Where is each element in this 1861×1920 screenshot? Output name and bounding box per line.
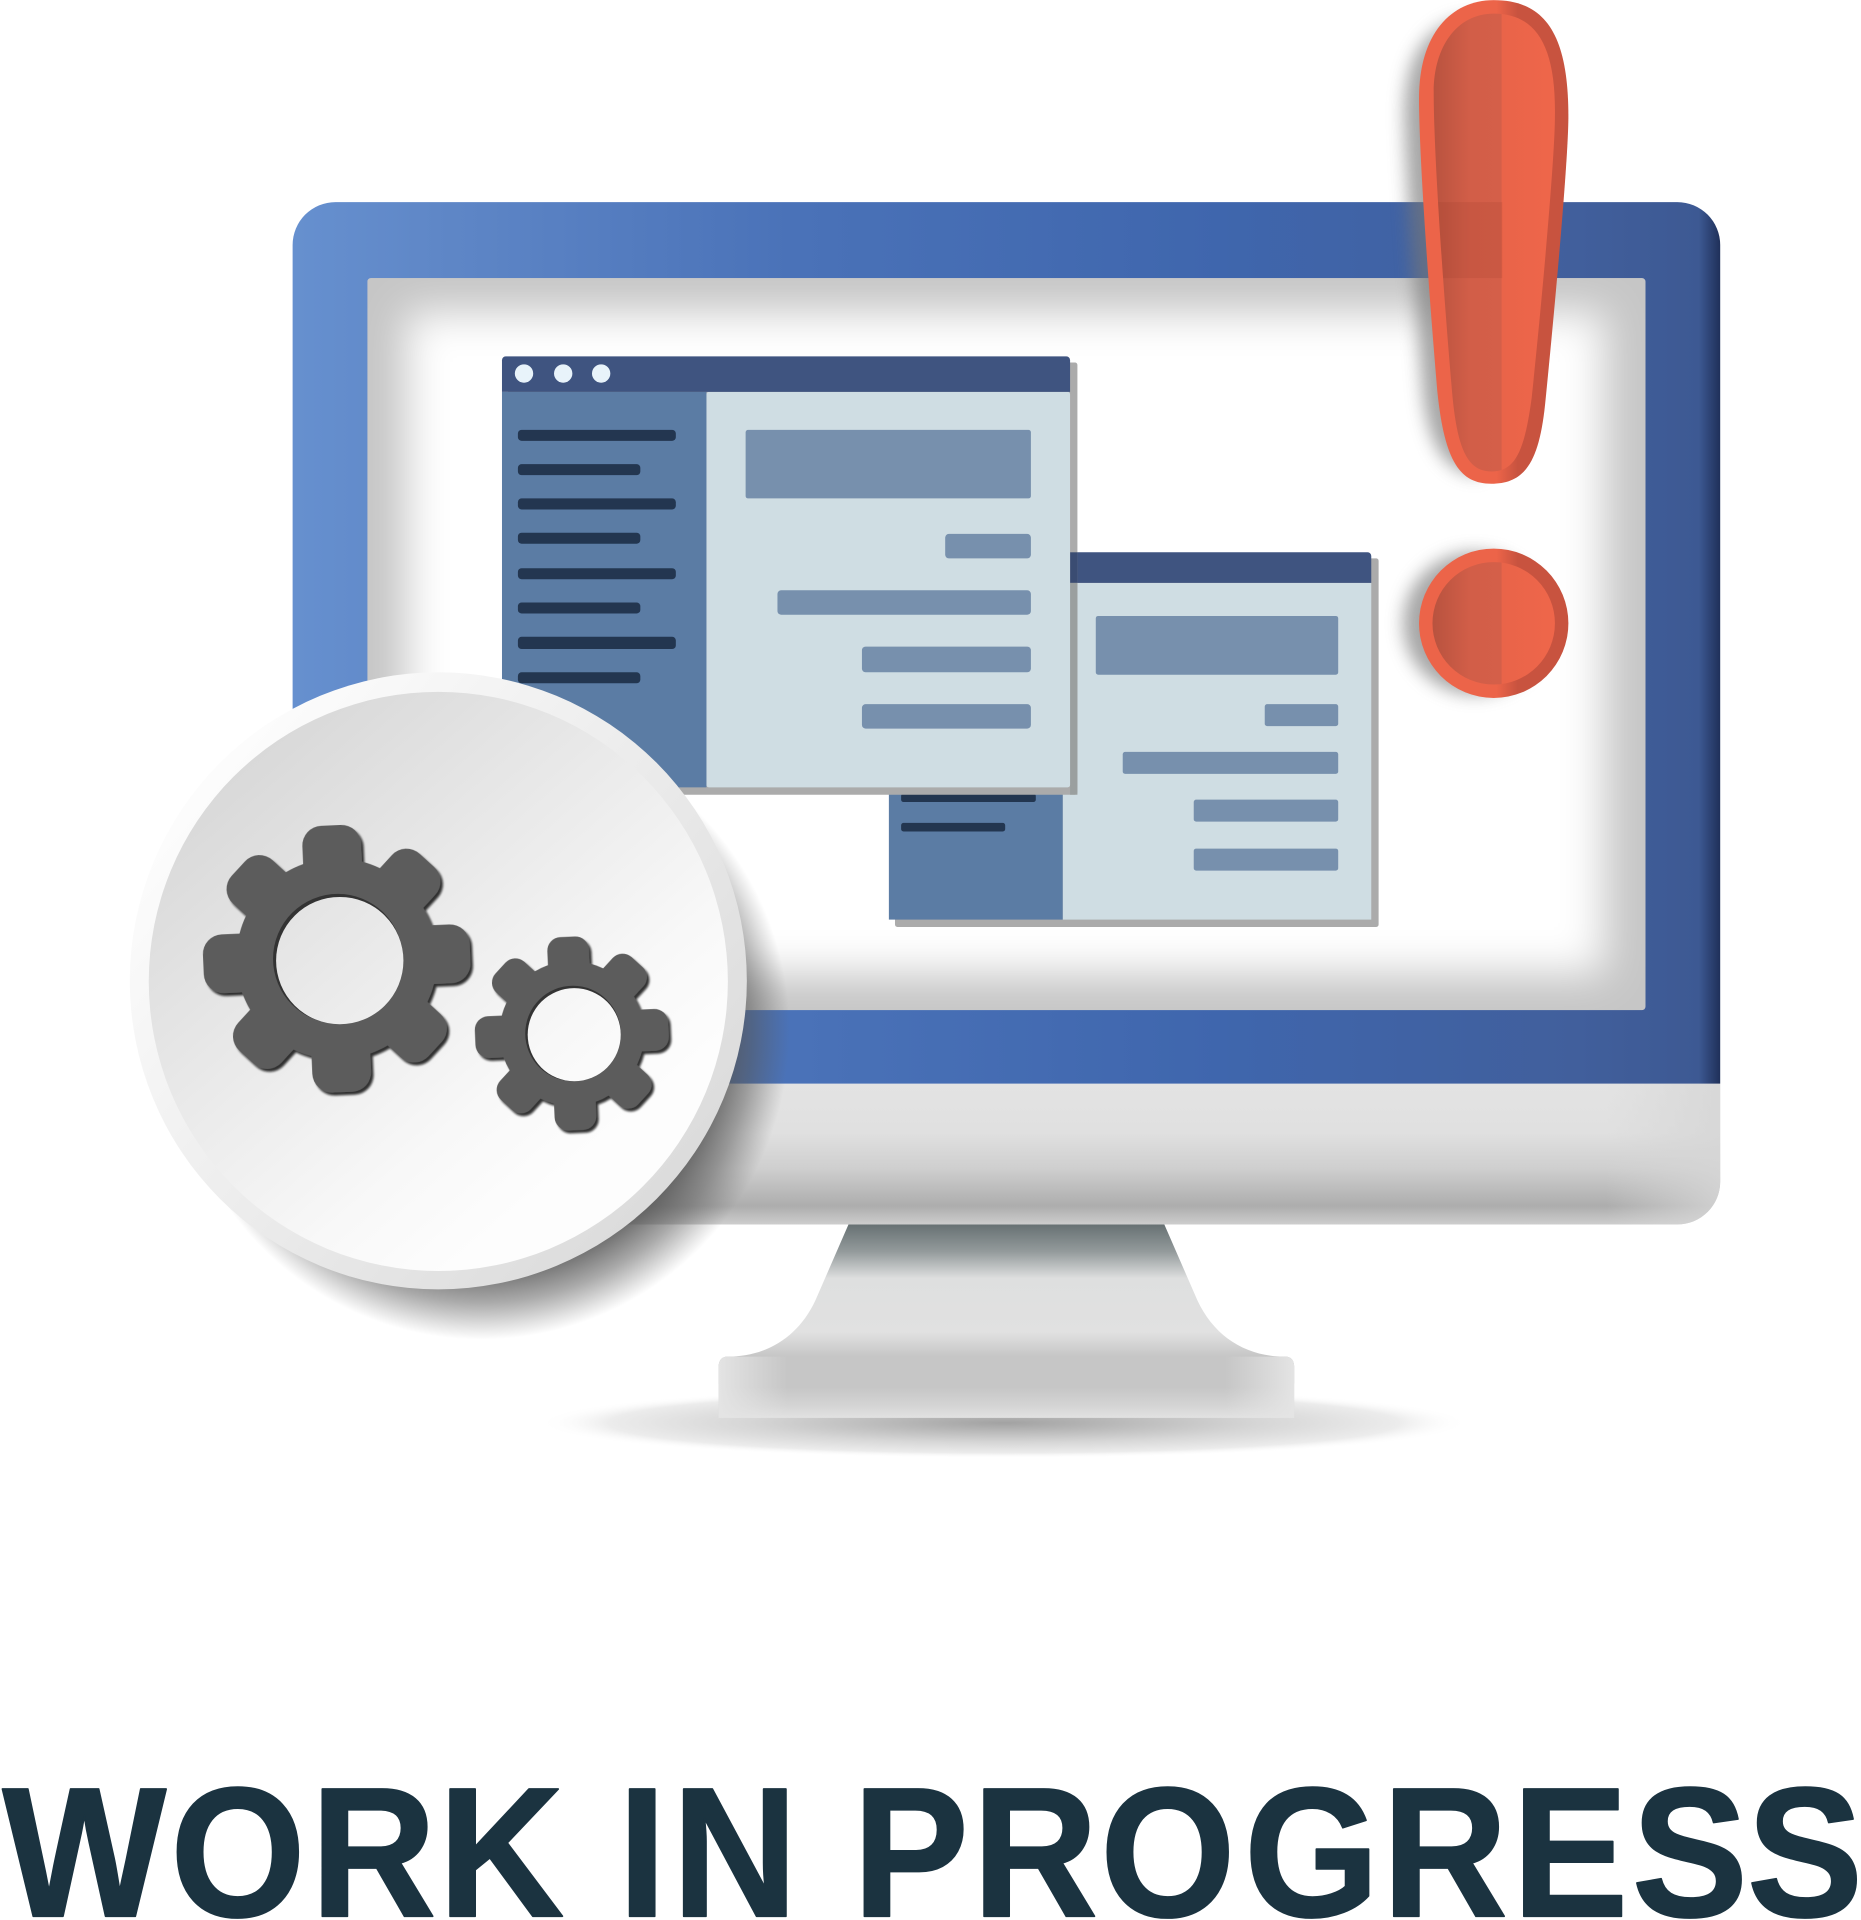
- shadow over back window: [1070, 552, 1077, 795]
- back window sidebar: [889, 583, 1063, 920]
- monitor screen: [367, 278, 1646, 1010]
- monitor stand: [719, 1224, 1294, 1418]
- monitor: [293, 202, 1720, 1418]
- exclamation bar: [1419, 0, 1568, 484]
- front window content blocks: [746, 430, 1031, 729]
- exclamation dot: [1419, 549, 1568, 698]
- front window content pane: [706, 392, 1070, 787]
- monitor base: [293, 1084, 1720, 1224]
- icon: small gear: [471, 933, 673, 1134]
- window control dots: [515, 364, 610, 383]
- back window content blocks: [1096, 616, 1338, 871]
- front window title bar: [502, 356, 1070, 392]
- front window: [502, 356, 1077, 795]
- badge face: [149, 692, 728, 1271]
- exclamation shadow: [1403, 17, 1545, 694]
- front window sidebar: [502, 392, 706, 787]
- badge shadow: [173, 722, 790, 1340]
- floor shadow: [539, 1387, 1469, 1458]
- front window sidebar lines: [518, 430, 676, 683]
- icon: large gear: [198, 820, 476, 1098]
- monitor blue frame: [293, 202, 1720, 1084]
- settings badge: [130, 672, 790, 1340]
- back window sidebar lines: [901, 793, 1036, 831]
- exclamation mark: [1403, 0, 1568, 698]
- back window content pane: [1063, 583, 1371, 920]
- back window title bar: [889, 552, 1371, 583]
- back window: [889, 552, 1379, 927]
- badge outer ring: [130, 672, 747, 1289]
